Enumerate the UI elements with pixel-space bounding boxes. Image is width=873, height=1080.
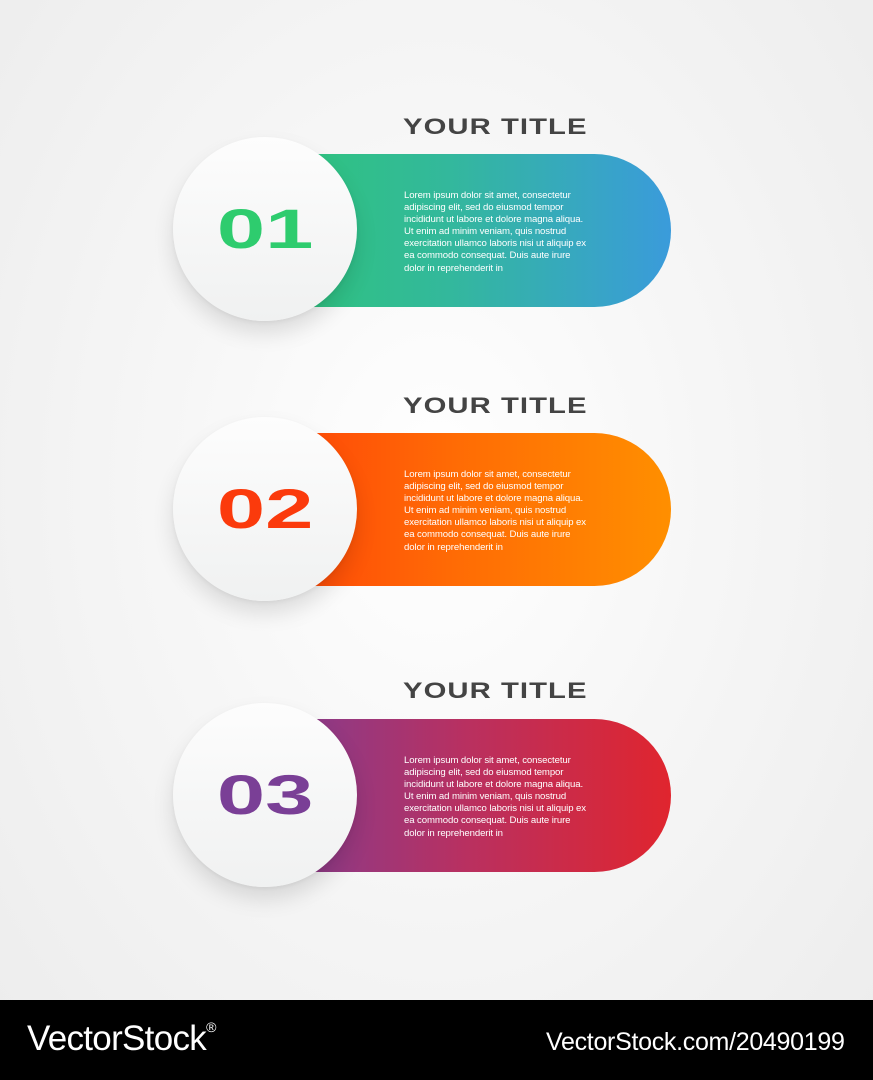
circle 3 <box>173 703 357 887</box>
title 2: YOUR TITLE <box>403 393 588 418</box>
title 3: YOUR TITLE <box>403 678 588 703</box>
panel: item 2 bar <box>300 433 671 586</box>
text block 1: Lorem ipsum dolor sit amet, consectetur adipiscing elit, sed do eiusmod tempor incididunt ut labore et dolore magna aliqua. Ut enim ad minim veniam, quis nostrud exercitation ullamco laboris nisi ut aliquip ex ea commodo consequat. Duis aute irure dolor in reprehenderit in <box>404 190 586 274</box>
panel: item 1 bar <box>300 154 671 307</box>
number 02: 02 <box>217 477 313 540</box>
number 01: 01 <box>217 197 313 260</box>
number 03: 03 <box>217 763 313 826</box>
panel: item 3 bar <box>300 719 671 872</box>
circle 1 <box>173 137 357 321</box>
footer logo: VectorStock® <box>27 1019 216 1058</box>
circle 2 <box>173 417 357 601</box>
text block 2: Lorem ipsum dolor sit amet, consectetur adipiscing elit, sed do eiusmod tempor incididunt ut labore et dolore magna aliqua. Ut enim ad minim veniam, quis nostrud exercitation ullamco laboris nisi ut aliquip ex ea commodo consequat. Duis aute irure dolor in reprehenderit in <box>404 469 586 553</box>
footer bar <box>0 1000 873 1080</box>
text block 3: Lorem ipsum dolor sit amet, consectetur adipiscing elit, sed do eiusmod tempor incididunt ut labore et dolore magna aliqua. Ut enim ad minim veniam, quis nostrud exercitation ullamco laboris nisi ut aliquip ex ea commodo consequat. Duis aute irure dolor in reprehenderit in <box>404 755 586 839</box>
footer url: VectorStock.com/20490199 <box>546 1028 845 1056</box>
title 1: YOUR TITLE <box>403 114 588 139</box>
